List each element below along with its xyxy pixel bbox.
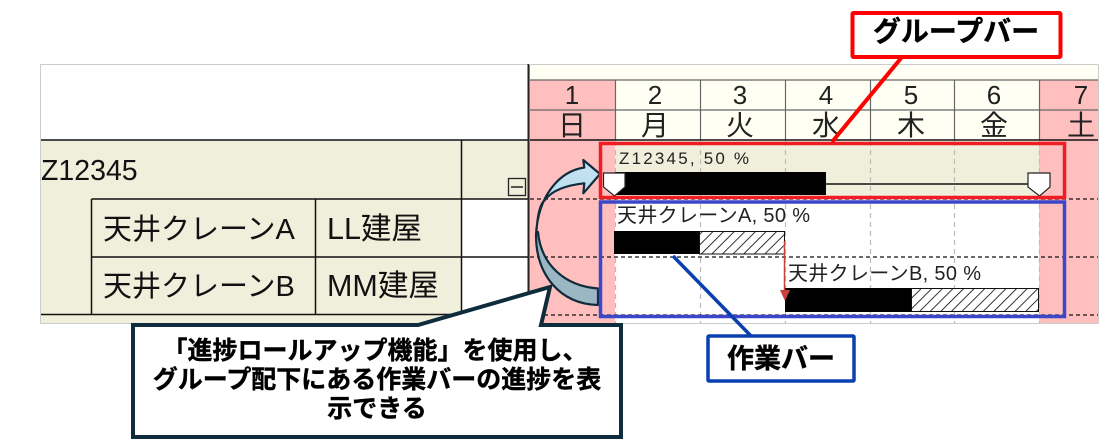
date numbers: 6: [987, 80, 1001, 110]
task bar B: [785, 262, 1038, 312]
callout: progress roll-up: グループ配下にある作業バーの進捗を表: [153, 365, 601, 394]
weekday labels: 土: [1067, 110, 1095, 141]
callout: progress roll-up: [133, 287, 621, 437]
task B label: 天井クレーンB, 50 %: [788, 262, 981, 285]
highlight: task bars frame: [600, 202, 1064, 316]
callout: task bar: 作業バー: [727, 344, 835, 374]
weekday labels: 木: [897, 110, 925, 141]
row label: crane B: 天井クレーンB: [103, 270, 295, 303]
date numbers: 3: [733, 80, 747, 110]
end marker: [1028, 173, 1050, 196]
date numbers: 2: [648, 80, 662, 110]
row label: building MM: MM建屋: [327, 269, 439, 303]
highlight: group bar frame: [600, 144, 1064, 198]
weekday labels: 金: [980, 110, 1008, 141]
curved arrow: [536, 160, 600, 305]
group bar: [604, 149, 1050, 196]
date numbers: 5: [904, 80, 918, 110]
leader line: group bar: [832, 57, 902, 142]
callout: group bar: [852, 13, 1060, 57]
panel: calendar timeline: [40, 64, 1098, 324]
task A label: 天井クレーンA, 50 %: [617, 204, 810, 227]
start marker: [604, 173, 625, 196]
row label: Z12345: Z12345: [41, 155, 138, 187]
date numbers: 4: [819, 80, 833, 110]
weekday labels: [558, 110, 1095, 141]
callout: task bar: [708, 336, 854, 381]
row label: building LL: LL建屋: [327, 212, 422, 246]
callout: group bar: グループバー: [873, 15, 1039, 47]
date numbers: [565, 80, 1088, 110]
date numbers: 7: [1074, 80, 1088, 110]
weekday labels: 日: [558, 110, 586, 141]
row label: crane A: 天井クレーンA: [103, 213, 296, 246]
weekday labels: 月: [641, 110, 669, 141]
icon: collapse button: [508, 178, 526, 196]
callout: progress roll-up: 「進捗ロールアップ機能」を使用し、: [162, 337, 588, 365]
dependency arrow: [780, 241, 790, 301]
callout: progress roll-up: 示できる: [327, 395, 427, 423]
date numbers: 1: [565, 80, 579, 110]
panel: task table: [40, 64, 530, 324]
weekday labels: 水: [812, 110, 840, 141]
leader line: task bar: [673, 256, 752, 337]
group bar label: Z12345, 50 %: [619, 149, 751, 168]
task bar A: [614, 204, 810, 254]
weekday labels: 火: [726, 110, 754, 141]
